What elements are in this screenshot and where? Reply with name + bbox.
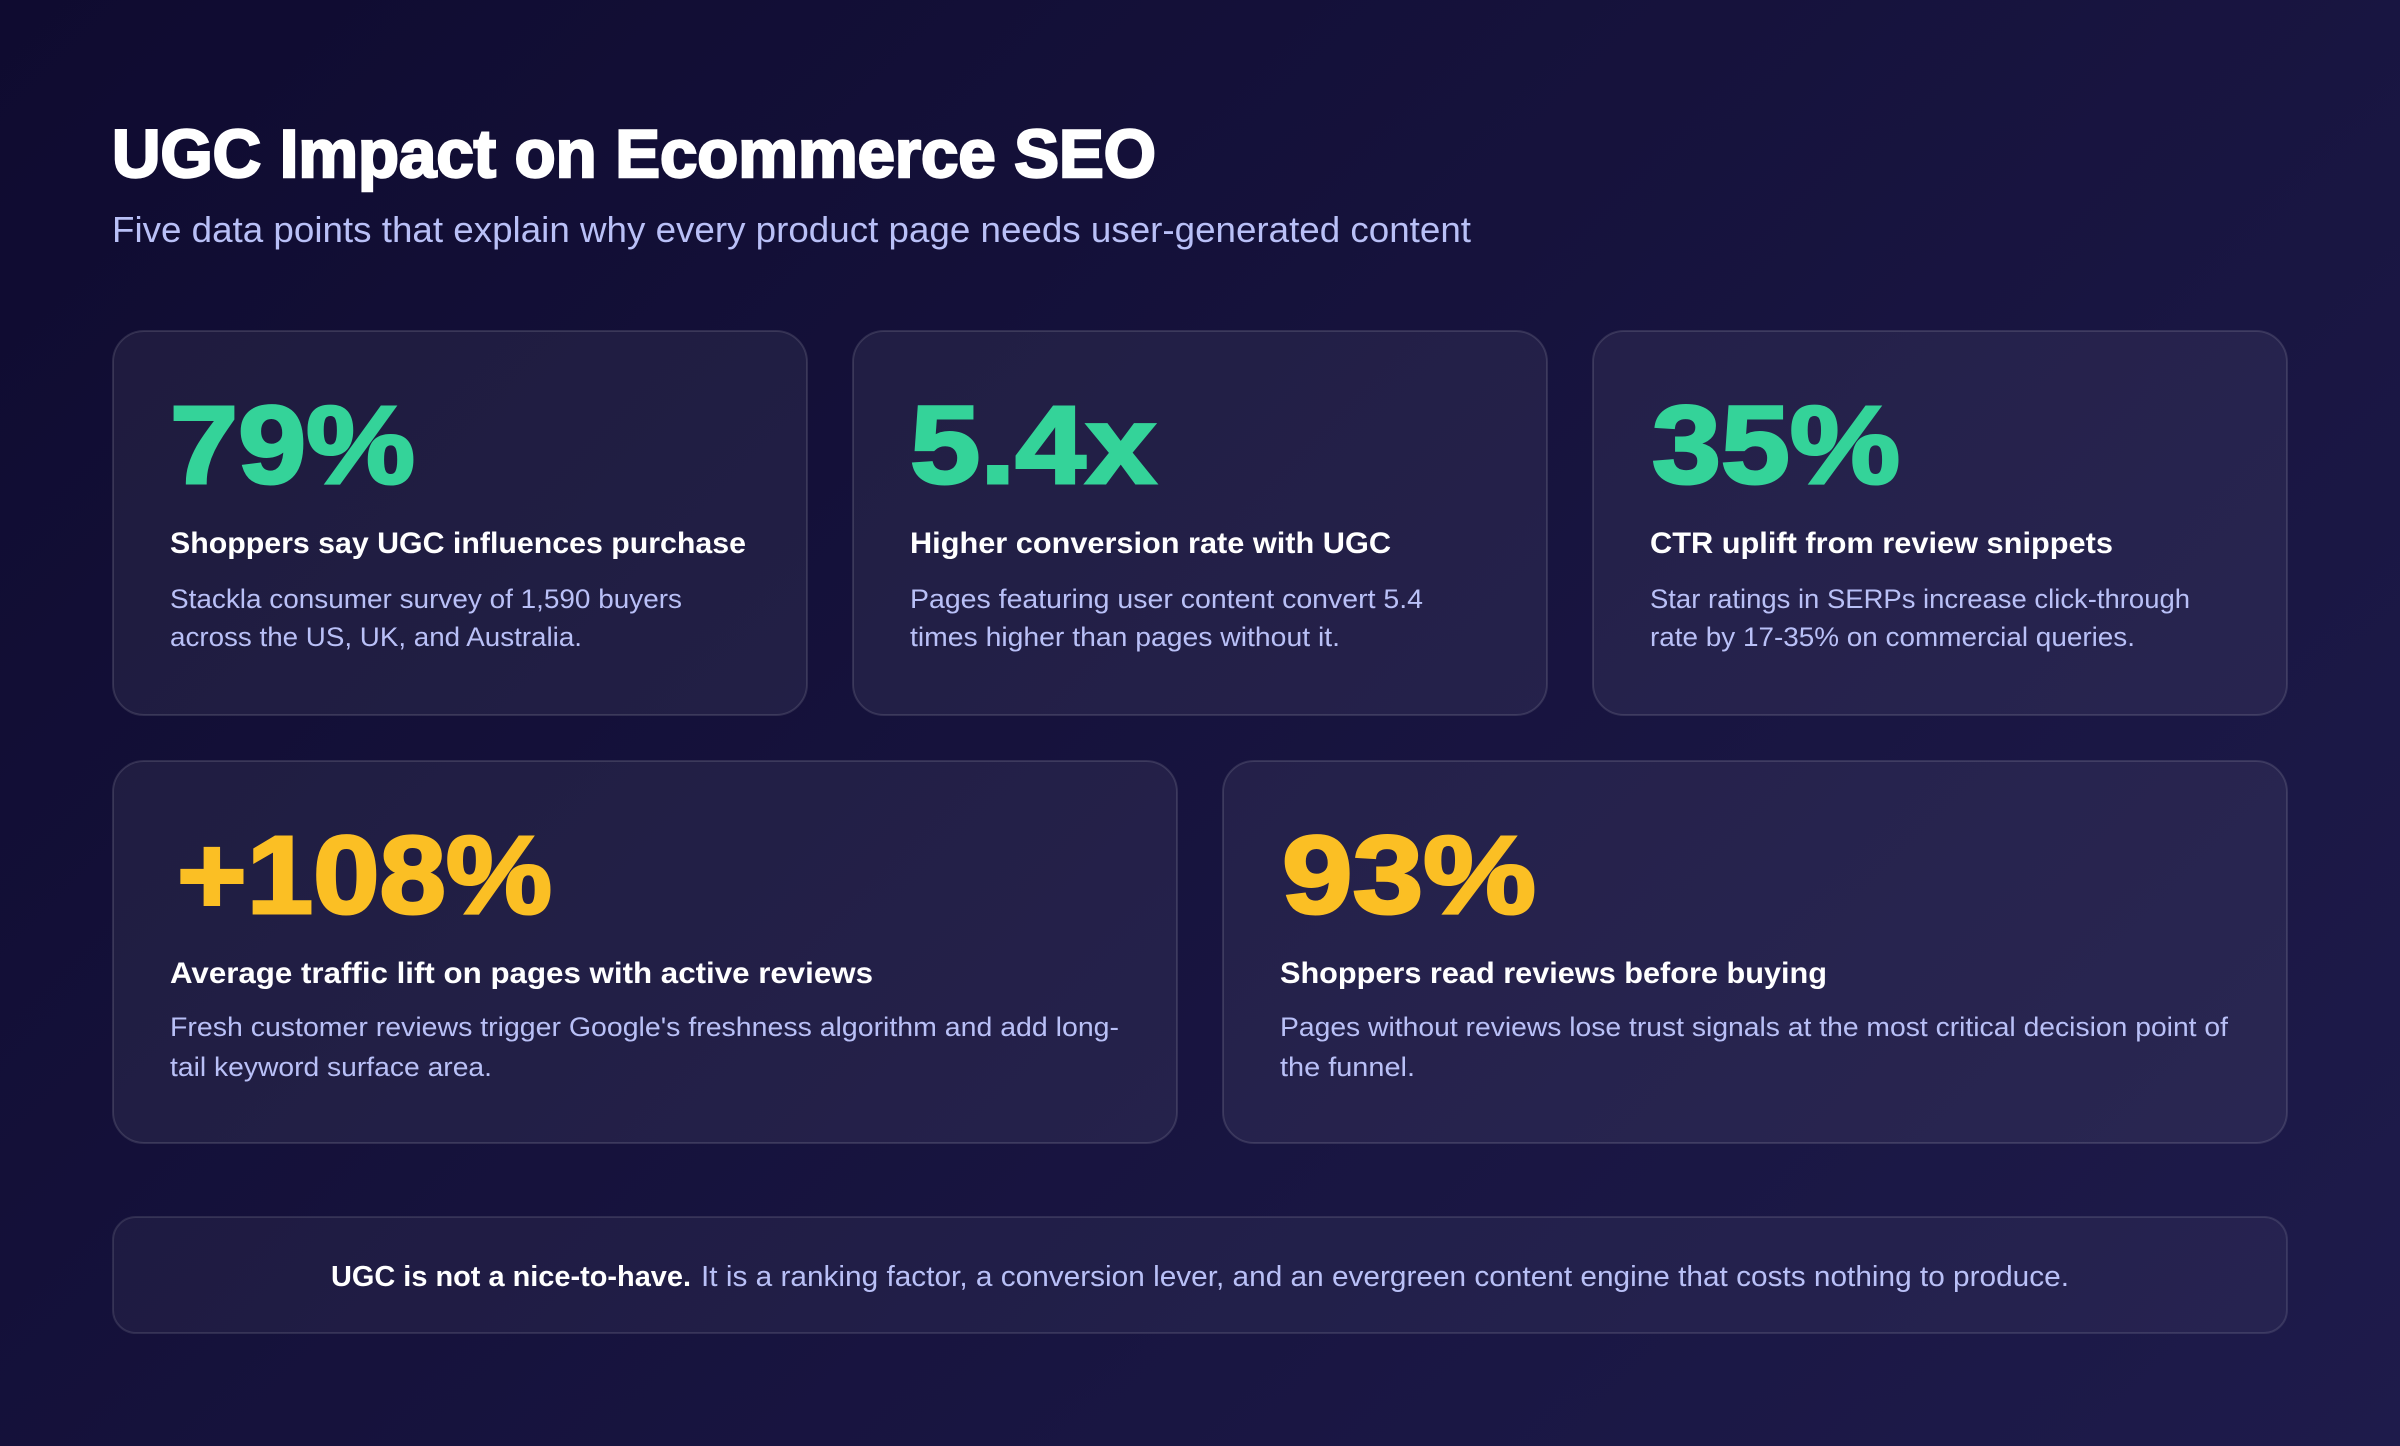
description: Stackla survey: Stackla consumer survey of 1,590 buyers [170,584,682,614]
description: pages featuring user content: Pages featuring user content convert 5.4 [910,584,1423,614]
heading: shoppers say UGC: Shoppers say UGC influences purchase [170,527,746,560]
heading: average traffic lift: Average traffic lift on pages with active reviews [170,957,873,990]
description: star ratings: Star ratings in SERPs increase click-through [1650,584,2190,614]
heading: higher conversion: Higher conversion rate with UGC [910,527,1391,560]
description: pages without reviews: the funnel. [1280,1052,1415,1082]
heading: shoppers read reviews: Shoppers read reviews before buying [1280,957,1827,990]
panel: 93% read reviews [1223,761,2287,1143]
description: pages featuring user content: times higher than pages without it. [910,622,1340,652]
stat: 5.4x: 5.4x [910,384,1156,507]
callout bold lead: UGC is not a nice-to-have. [331,1261,691,1293]
description: fresh customer reviews: Fresh customer reviews trigger Google's freshness algorithm and add long- [170,1012,1119,1042]
description: fresh customer reviews: tail keyword surface area. [170,1052,492,1082]
description: star ratings: rate by 17-35% on commercial queries. [1650,622,2135,652]
description: star ratings [1650,584,2190,652]
heading: CTR uplift: CTR uplift from review snippets [1650,527,2113,560]
stat: 79%: 79% [170,384,415,507]
description: Stackla survey [170,584,682,652]
stat: +108%: +108% [177,814,552,937]
title: UGC Impact on Ecommerce SEO [112,116,1156,192]
panel: 79% shoppers [113,331,807,715]
description: Stackla survey: across the US, UK, and Australia. [170,622,582,652]
subtitle: Five data points that explain why every product page needs user-generated content [112,209,1471,250]
callout body text: It is a ranking factor, a conversion lever, and an evergreen content engine that costs nothing to produce. [701,1261,2069,1293]
panel: 35% CTR [1593,331,2287,715]
stat: 35%: 35% [1652,384,1900,507]
callout: bottom takeaway [113,1217,2287,1333]
panel: +108% traffic [113,761,1177,1143]
panel: 5.4x conversion [853,331,1547,715]
description: pages featuring user content [910,584,1423,652]
stat: 93%: 93% [1282,814,1536,937]
description: pages without reviews [1280,1012,2229,1082]
description: fresh customer reviews [170,1012,1119,1082]
description: pages without reviews: Pages without reviews lose trust signals at the most critical decision point of [1280,1012,2229,1042]
